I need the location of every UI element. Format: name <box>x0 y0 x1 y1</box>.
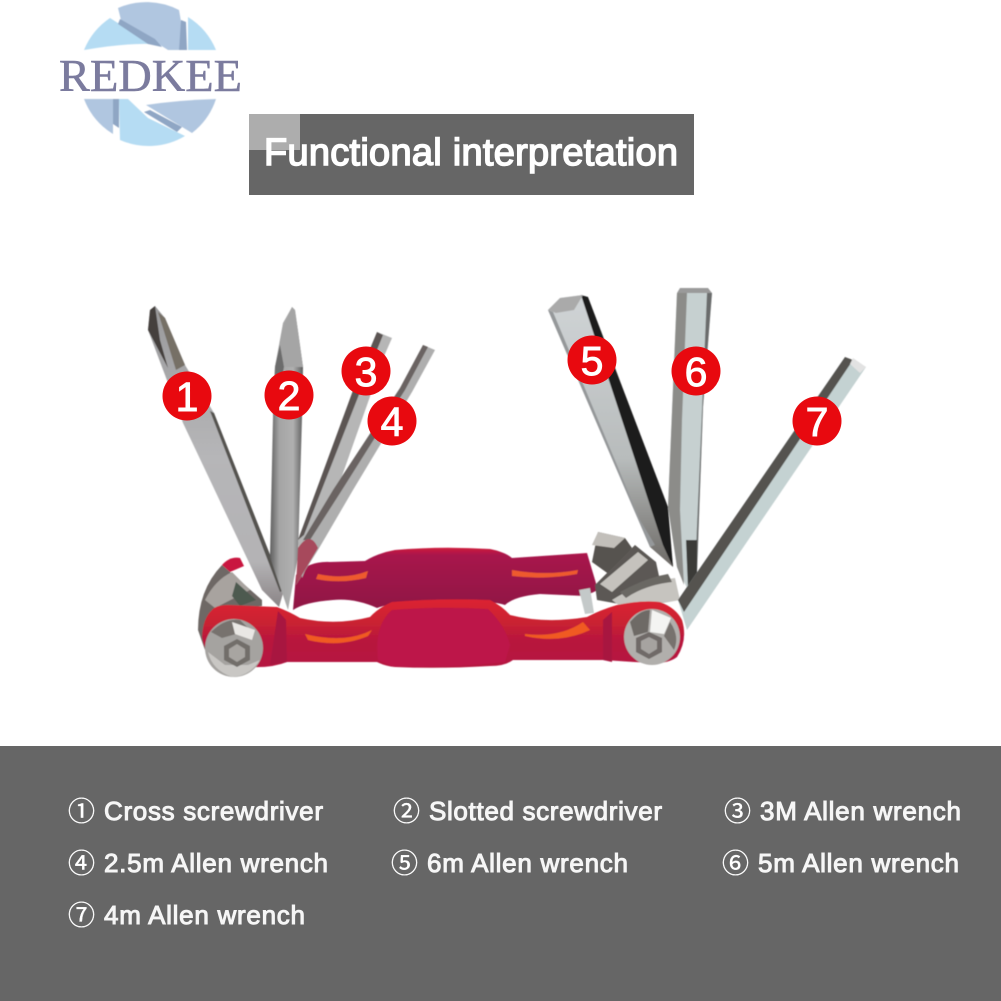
handle centre plate <box>377 608 510 666</box>
tool 3: 3M Allen wrench <box>298 332 392 578</box>
title text: Functional interpretation <box>264 132 678 174</box>
legend 7: 4m Allen wrench <box>104 900 305 930</box>
badge 2 <box>264 370 314 420</box>
legend 3: ③ <box>724 797 751 827</box>
logo: REDKEE <box>59 2 242 146</box>
tool 6: 5m Allen wrench <box>668 288 712 590</box>
badge 6 <box>672 346 720 396</box>
legend 5: 6m Allen wrench <box>427 848 628 878</box>
number badges <box>162 336 842 446</box>
legend 4: ④ <box>68 849 95 879</box>
left pivot stack <box>198 558 262 650</box>
handle end shading <box>270 611 612 665</box>
legend 2: ② <box>393 797 420 827</box>
right bolt <box>624 609 680 665</box>
legend 1: ① <box>68 797 95 827</box>
tool 1: cross screwdriver <box>148 306 284 607</box>
title bar <box>249 114 694 195</box>
badge 5: 5 <box>581 338 603 384</box>
logo wordmark: REDKEE <box>59 51 242 101</box>
legend 7: ⑦ <box>68 901 95 931</box>
legend panel <box>0 746 1001 1001</box>
legend 6: 5m Allen wrench <box>758 848 959 878</box>
multi-tool illustration <box>148 288 866 677</box>
handle front bar <box>202 599 684 668</box>
handle back highlight <box>316 570 578 581</box>
tool 4: 2.5m Allen wrench <box>296 345 435 585</box>
badge 6: 6 <box>685 349 707 395</box>
tool 7: 4m Allen wrench <box>678 357 866 630</box>
right pivot stack <box>579 532 680 614</box>
legend 4: 2.5m Allen wrench <box>104 848 328 878</box>
tool 2: slotted screwdriver <box>270 307 303 610</box>
badge 7: 7 <box>806 399 828 445</box>
handle highlights <box>305 622 590 643</box>
badge 3: 3 <box>355 349 377 395</box>
title accent square <box>249 114 300 150</box>
logo aperture circle <box>84 2 216 146</box>
legend 6: ⑥ <box>722 849 749 879</box>
legend 2: Slotted screwdriver <box>429 796 662 826</box>
legend 1: Cross screwdriver <box>104 796 323 826</box>
badge 4: 4 <box>381 399 403 445</box>
handle back bar <box>293 548 598 610</box>
badge 5 <box>568 336 616 384</box>
badge 4 <box>368 396 416 446</box>
legend 5: ⑤ <box>391 849 418 879</box>
badge 2: 2 <box>278 373 300 419</box>
tool 5: 6m Allen wrench <box>548 295 673 567</box>
badge 1 <box>162 372 212 420</box>
legend 3: 3M Allen wrench <box>760 796 961 826</box>
badge 7 <box>792 396 842 446</box>
left bolt <box>205 619 263 677</box>
badge 3 <box>342 346 390 396</box>
badge 1: 1 <box>176 374 198 420</box>
